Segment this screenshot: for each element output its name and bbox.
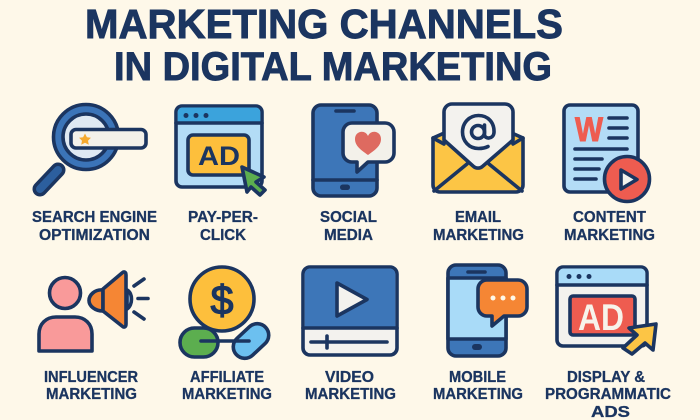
title: MARKETING CHANNELS xyxy=(85,1,563,47)
panel: pay-per-click xyxy=(176,106,265,244)
label xyxy=(433,209,524,244)
title xyxy=(85,1,563,89)
icon: dollar coin with chain links: $ xyxy=(211,277,234,323)
label: EMAIL xyxy=(455,209,501,226)
label: MARKETING xyxy=(433,227,524,244)
icon: video player xyxy=(303,267,397,355)
label: MARKETING xyxy=(564,227,655,244)
label: VIDEO xyxy=(325,369,374,386)
label: SEARCH ENGINE xyxy=(32,209,157,226)
label: MEDIA xyxy=(324,227,373,244)
icon: browser ad with arrow: AD xyxy=(578,297,624,338)
label xyxy=(564,209,655,244)
label xyxy=(545,369,671,420)
label xyxy=(32,209,157,244)
panel: social media xyxy=(313,105,394,244)
icon: phone with heart bubble xyxy=(313,105,394,196)
label: PAY-PER- xyxy=(188,209,258,226)
label xyxy=(182,369,272,403)
panel: influencer marketing xyxy=(39,272,148,403)
label xyxy=(44,369,138,403)
panel: display and programmatic ads xyxy=(545,267,671,420)
icon: phone with chat bubble xyxy=(448,265,527,356)
label xyxy=(433,369,523,403)
label: SOCIAL xyxy=(320,209,377,226)
icon: person with megaphone xyxy=(39,272,148,351)
icon: browser ad with cursor: AD xyxy=(198,141,240,171)
panel: affiliate marketing xyxy=(180,267,273,403)
label: MARKETING xyxy=(182,386,272,403)
icon: browser ad with arrow xyxy=(557,267,656,354)
label: CONTENT xyxy=(573,209,647,226)
panel: content marketing xyxy=(564,105,655,244)
label xyxy=(305,369,396,403)
label: AFFILIATE xyxy=(190,369,264,386)
label xyxy=(320,209,377,244)
panel: video marketing xyxy=(303,267,397,403)
label: PROGRAMMATIC xyxy=(545,386,671,403)
panel: search engine optimization xyxy=(32,104,157,244)
label: CLICK xyxy=(200,227,247,244)
icon: magnifying glass with search bar xyxy=(40,104,146,189)
label: DISPLAY & xyxy=(567,369,645,386)
label: INFLUENCER xyxy=(44,369,138,386)
label: MARKETING xyxy=(305,386,396,403)
label: MOBILE xyxy=(449,369,506,386)
title: IN DIGITAL MARKETING xyxy=(114,45,552,89)
icon: document with play button: W xyxy=(575,111,604,149)
label xyxy=(188,209,258,244)
label: MARKETING xyxy=(46,386,137,403)
panel: email marketing xyxy=(433,104,524,244)
label: OPTIMIZATION xyxy=(39,227,150,244)
panel: mobile marketing xyxy=(433,265,527,403)
icon: envelope with at-sign letter xyxy=(433,104,523,192)
label: MARKETING xyxy=(433,386,523,403)
